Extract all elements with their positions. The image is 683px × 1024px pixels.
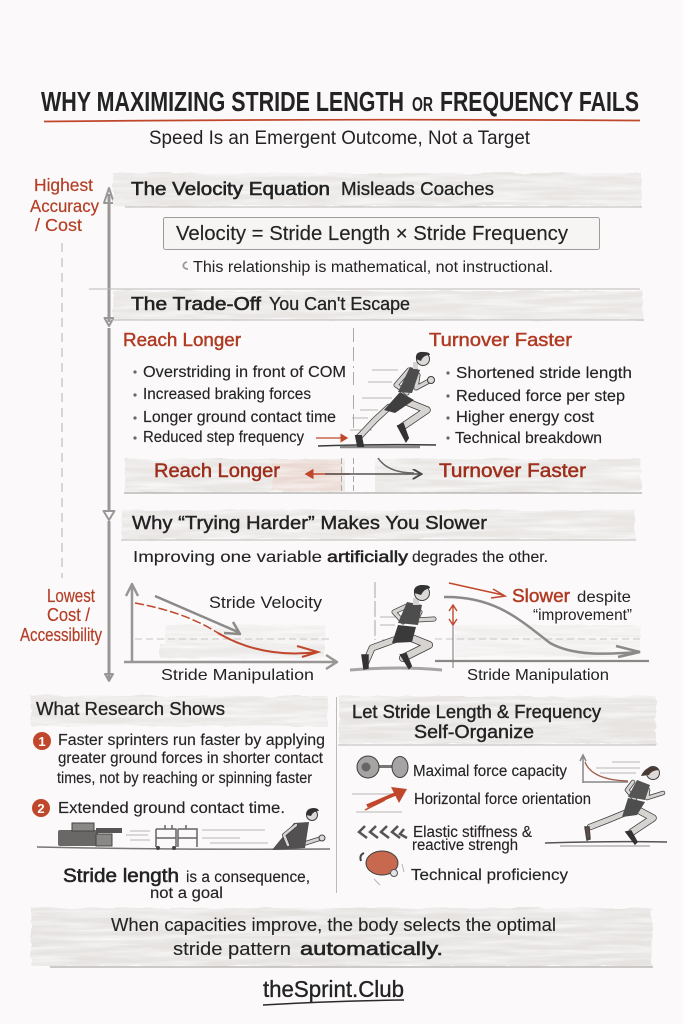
comparison band <box>124 458 642 493</box>
chart: slower despite improvement <box>435 583 649 684</box>
arrow: red to foot <box>316 437 347 439</box>
heading: Self-Organize <box>414 722 534 742</box>
item: maximal force: Maximal force capacity <box>413 763 567 780</box>
illustration: female sprinter <box>545 766 667 846</box>
panel: velocity equation <box>113 173 642 276</box>
label: slower despite: despite <box>577 589 631 606</box>
turnover faster bullets: Shortened stride length <box>456 365 632 382</box>
title: WHY MAXIMIZING STRIDE LENGTH <box>41 86 404 117</box>
section band <box>113 173 642 207</box>
formula box: Velocity = Stride Length × Stride Frequency <box>176 223 568 245</box>
panel: trade-off <box>89 289 644 493</box>
panel: what research shows <box>31 696 330 902</box>
label: stride velocity: Stride Velocity <box>209 593 323 612</box>
vertical double arrow <box>104 188 114 681</box>
column: turnover faster <box>429 329 632 447</box>
heading: Let Stride Length & Frequency <box>352 702 601 722</box>
title underline <box>44 120 640 122</box>
label: highest accuracy / cost: / Cost <box>35 215 82 235</box>
label: lowest cost / accessibility: Cost / <box>47 605 90 625</box>
section band <box>338 696 656 745</box>
section band <box>121 510 636 540</box>
finding 1: 1 <box>38 734 46 749</box>
arrow: double red <box>449 605 457 625</box>
finding 2: 2 <box>37 801 45 816</box>
item: horizontal force <box>352 787 591 812</box>
arrow: opposing directions <box>306 458 420 474</box>
section band <box>89 289 644 320</box>
finding 1: greater ground forces in shorter contact <box>58 750 324 767</box>
turnover faster bullets: Technical breakdown <box>455 430 602 447</box>
panel divider <box>336 697 338 893</box>
panel: takeaway <box>31 908 653 967</box>
label: slower despite: Slower <box>512 585 570 606</box>
lead sentence: degrades the other. <box>412 549 548 566</box>
curve: red dashed then solid <box>135 603 318 657</box>
heading: What Research Shows <box>36 699 225 719</box>
subtitle: Speed Is an Emergent Outcome, Not a Target <box>149 128 531 149</box>
left axis: accuracy versus cost <box>20 175 114 681</box>
conclusion: not a goal <box>150 885 223 902</box>
reach longer bullets: Overstriding in front of COM <box>143 364 346 381</box>
item: elastic stiffness: reactive strengh <box>412 837 518 854</box>
finding 2: Extended ground contact time. <box>58 800 285 817</box>
panel: trying harder <box>121 510 649 684</box>
heading <box>131 294 410 314</box>
item: elastic stiffness <box>359 824 533 854</box>
conclusion <box>63 866 310 902</box>
curve arrow: grey <box>155 596 240 634</box>
label: lowest cost / accessibility <box>20 586 102 645</box>
band shape <box>124 458 642 493</box>
heading <box>131 179 494 199</box>
reach longer bullets: Reduced step frequency <box>143 429 304 446</box>
dashed connector <box>61 243 63 578</box>
conclusion: is a consequence, <box>186 869 310 886</box>
label: slower despite <box>512 585 632 624</box>
turnover faster bullets: Higher energy cost <box>456 409 595 426</box>
column: reach longer: Reach Longer <box>123 329 241 350</box>
reach longer bullets: Increased braking forces <box>143 386 311 403</box>
message: stride pattern <box>173 939 291 959</box>
message: automatically. <box>300 939 443 959</box>
column: reach longer <box>123 329 346 446</box>
finding 1: Faster sprinters run faster by applying <box>58 732 325 749</box>
label: x axis: Stride Manipulation <box>467 667 609 684</box>
item: technical proficiency: Technical proficiency <box>411 867 568 884</box>
turnover faster bullets: Reduced force per step <box>456 388 625 405</box>
arrow: red slower <box>449 583 505 598</box>
panel: self-organize <box>338 696 667 885</box>
curve: velocity drop <box>444 597 640 657</box>
footer brand: theSprint.Club <box>263 976 404 1002</box>
heading: The Trade-Off <box>131 294 262 314</box>
reach longer bullets <box>133 364 346 446</box>
illustration: machine, hurdles and sprinter <box>37 808 330 850</box>
illustration: sprinter <box>318 352 436 447</box>
heading: Why “Trying Harder” Makes You Slower <box>132 513 487 533</box>
center divider <box>352 328 354 490</box>
item: technical proficiency <box>360 851 568 885</box>
lead sentence: artificially <box>327 549 408 566</box>
formula box <box>164 218 600 250</box>
title: OR <box>412 94 433 116</box>
column: turnover faster: Turnover Faster <box>429 329 572 350</box>
illustration: sprinter mid <box>350 582 442 670</box>
label: turnover faster: Turnover Faster <box>439 461 587 482</box>
turnover faster bullets <box>446 365 632 447</box>
label: slower despite: “improvement” <box>533 607 632 624</box>
section band <box>31 696 327 726</box>
conclusion: Stride length <box>63 866 179 887</box>
label: reach longer: Reach Longer <box>154 461 281 482</box>
icon: spring <box>359 826 407 838</box>
heading: You Can't Escape <box>269 294 410 314</box>
finding 1: times, not by reaching or spinning faster <box>57 770 312 787</box>
finding 1 <box>33 732 325 787</box>
label: highest accuracy / cost <box>30 175 99 235</box>
heading <box>352 702 601 742</box>
icon: dumbbell <box>357 756 408 778</box>
lead sentence: Improving one variable <box>133 549 322 566</box>
item: horizontal force: Horizontal force orientation <box>414 791 591 808</box>
mini chart <box>580 755 640 783</box>
label: lowest cost / accessibility: Accessibility <box>20 625 102 645</box>
message <box>111 915 556 959</box>
chart: stride velocity <box>124 584 337 684</box>
item: elastic stiffness: Elastic stiffness & <box>413 824 533 841</box>
label: highest accuracy / cost: Accuracy <box>30 196 99 216</box>
band <box>31 908 653 967</box>
lead sentence <box>133 549 548 566</box>
item: maximal force <box>357 756 567 780</box>
message: When capacities improve, the body selects the optimal <box>111 915 556 935</box>
reach longer bullets: Longer ground contact time <box>143 409 336 426</box>
heading: The Velocity Equation <box>131 179 330 199</box>
label: lowest cost / accessibility: Lowest <box>47 586 95 606</box>
label: x axis: Stride Manipulation <box>161 667 314 684</box>
note: This relationship is mathematical, not instructional. <box>193 259 553 276</box>
label: highest accuracy / cost: Highest <box>34 175 93 195</box>
heading: Misleads Coaches <box>341 179 494 199</box>
icon: brain <box>360 851 404 885</box>
icon: red arrow <box>352 787 407 812</box>
